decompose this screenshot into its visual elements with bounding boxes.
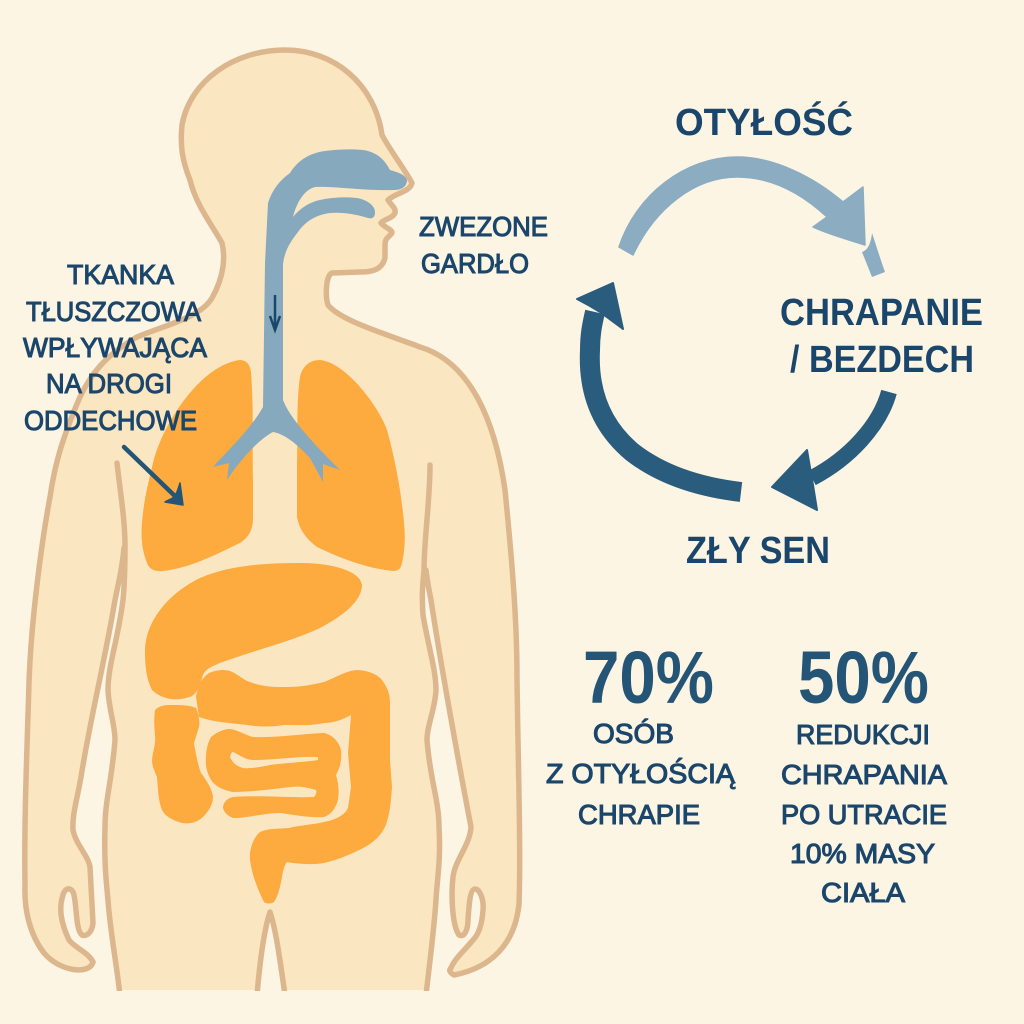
body silhouette	[0, 50, 540, 1024]
cycle label: snoring	[780, 292, 983, 381]
arrow: fatty tissue pointer	[124, 447, 183, 505]
label: fatty tissue: WPŁYWAJĄCA	[23, 332, 207, 363]
label: fatty tissue: TKANKA	[67, 259, 174, 290]
stat: 70 percent: OSÓB	[593, 718, 674, 749]
intestines	[152, 670, 392, 904]
cycle arrow: obesity to snoring	[619, 157, 885, 277]
cycle label: snoring: CHRAPANIE	[780, 292, 983, 334]
stat: 50 percent: 10% MASY	[790, 838, 935, 869]
label: fatty tissue: NA DROGI	[46, 368, 172, 399]
stat: 50 percent: REDUKCJI	[796, 719, 930, 750]
cycle label: snoring: / BEZDECH	[790, 339, 974, 381]
stat: 70 percent: 70%	[583, 636, 714, 719]
stat: 50 percent: CIAŁA	[821, 877, 905, 908]
stat: 50 percent	[781, 636, 947, 908]
label: fatty tissue: TŁUSZCZOWA	[26, 296, 201, 327]
stat: 70 percent: CHRAPIE	[578, 799, 700, 830]
stat: 50 percent: CHRAPANIA	[781, 759, 947, 790]
stat: 70 percent: Z OTYŁOŚCIĄ	[546, 757, 735, 789]
cycle heading: obesity: OTYŁOŚĆ	[675, 100, 853, 144]
airway	[213, 149, 407, 482]
cycle label: poor sleep: ZŁY SEN	[686, 530, 830, 572]
label: narrowed throat: ZWEZONE	[419, 211, 548, 242]
label: narrowed throat	[419, 211, 548, 279]
arrow: airway down	[270, 295, 280, 330]
cycle arrow: poor sleep to obesity	[577, 283, 741, 492]
stat: 50 percent: PO UTRACIE	[781, 799, 947, 830]
label: narrowed throat: GARDŁO	[421, 248, 529, 279]
label: fatty tissue: ODDECHOWE	[24, 405, 197, 436]
liver	[145, 563, 362, 699]
stat: 70 percent	[546, 636, 735, 830]
label: fatty tissue	[23, 259, 207, 436]
cycle arrow: snoring to poor sleep	[772, 392, 889, 510]
stat: 50 percent: 50%	[798, 636, 929, 719]
lungs	[142, 360, 405, 571]
